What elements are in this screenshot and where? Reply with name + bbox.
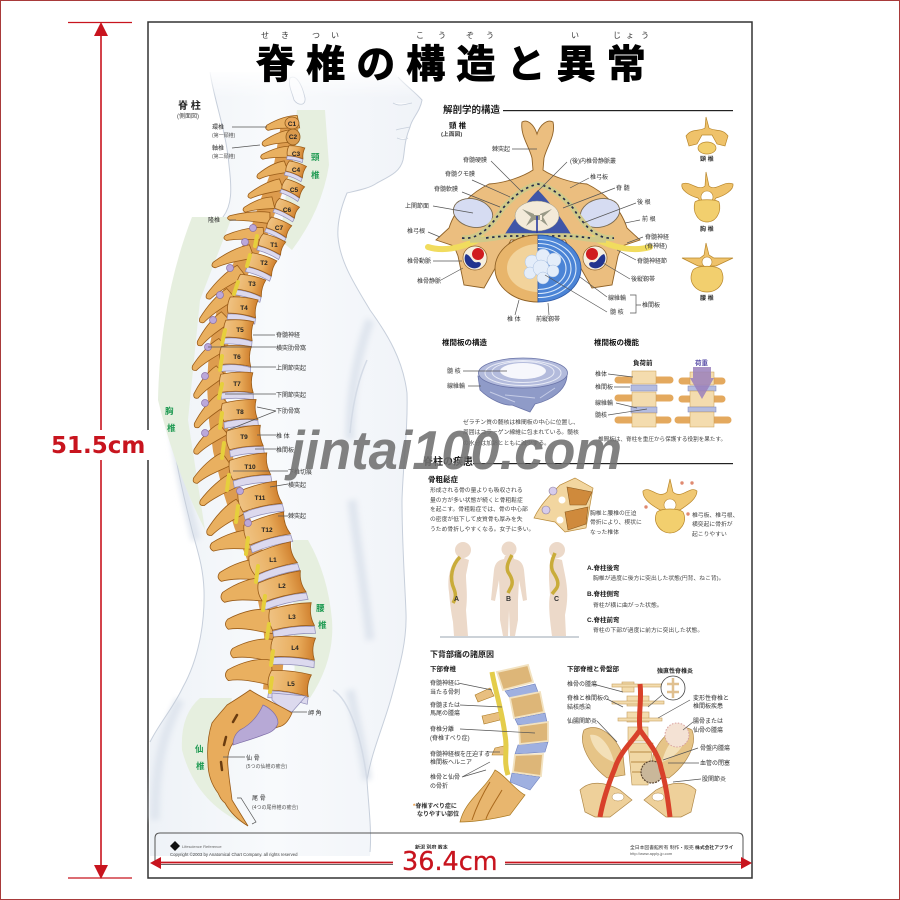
lower spine callouts: 脊髄神経根を圧迫する — [430, 750, 490, 758]
figure B scoliosis — [491, 542, 527, 636]
spondylolisthesis note — [413, 802, 459, 818]
sacrum ridges — [630, 752, 651, 772]
fracture caption — [590, 509, 642, 536]
title furigana: じ — [613, 31, 621, 40]
fracture sites caption: 横突起に骨折が — [692, 520, 733, 528]
cervical vertebra callouts: 椎骨動脈 — [407, 257, 431, 265]
cervical vertebra callouts: (脊神経) — [645, 242, 667, 250]
vertebral arch — [436, 121, 640, 288]
side view callouts: 尾 骨 — [252, 795, 266, 802]
disc structure paragraph: ゼラチン質の髄核は椎間板の中心に位置し、 — [463, 418, 579, 426]
footer credits: 新潟 別府 教本 — [415, 844, 448, 851]
lower spine and pelvis heading: 下部脊椎と骨盤部 — [567, 664, 620, 673]
vertebra level labels: T6 — [233, 354, 241, 361]
disc function caption: 椎間板は、脊柱を重圧から保護する役割を果たす。 — [598, 435, 726, 443]
watermark: jintai100.com — [284, 419, 622, 481]
section: anatomical structure heading: (上面図) — [441, 130, 462, 138]
disc function callouts: 椎間板 — [595, 383, 613, 391]
vertebra level labels: T12 — [261, 527, 273, 534]
section: anatomical structure heading — [441, 104, 733, 138]
spinal cord — [515, 201, 559, 231]
posture descriptions: A.脊柱後弯 — [587, 563, 620, 572]
title furigana: き — [281, 31, 289, 40]
title furigana: こ — [416, 31, 424, 40]
left panel heading — [177, 99, 201, 120]
vertebra level labels: C2 — [289, 134, 298, 141]
green region labels: 頸 — [311, 152, 320, 162]
side view callouts: (第二頸椎) — [212, 153, 236, 160]
side view callouts: (第一頸椎) — [212, 132, 236, 139]
vertebra level labels: T8 — [236, 409, 244, 416]
aorta and iliac arteries — [600, 684, 670, 817]
figure: spine side view — [188, 115, 316, 826]
osteoporosis paragraph: 形成される骨の量よりも吸収される — [430, 486, 523, 494]
cervical vertebra callouts: 椎弓板 — [590, 173, 608, 181]
width dimension arrow — [150, 847, 752, 877]
disc function: before load: 負荷前 — [633, 358, 653, 367]
pelvis callouts: 仙腸関節炎 — [567, 717, 597, 725]
sacrum and coccyx — [208, 690, 292, 826]
side view callouts: 棘突起 — [288, 512, 306, 520]
mini vertebra: cervical: 頸 椎 — [700, 155, 714, 163]
arm and fold lines — [333, 360, 367, 780]
posture descriptions: 胸椎が過度に後方に突出した状態(円背、ねこ背)。 — [593, 574, 724, 582]
lower spine callouts: 椎間板ヘルニア — [430, 758, 472, 766]
central vessel — [536, 216, 538, 236]
cervical vertebra callouts: 脊髄軟膜 — [434, 185, 458, 193]
regional shading: lumbar — [292, 540, 332, 698]
regional shading: cervical — [280, 110, 329, 250]
disc function heading: 椎間板の機能 — [594, 337, 639, 347]
grey matter — [522, 209, 552, 226]
side view callouts: 上関節突起 — [276, 364, 306, 372]
vertebra level labels: L5 — [287, 681, 295, 688]
cervical vertebra callouts: 椎弓根 — [407, 227, 425, 235]
height dimension arrow: 51.5cm — [51, 433, 145, 459]
disc function: under load — [678, 358, 728, 427]
vertebra level labels: C3 — [292, 151, 301, 158]
vertebra level labels: T4 — [240, 305, 248, 312]
side view callouts: (4つの尾骨椎の癒合) — [252, 804, 298, 811]
lower spine callouts: 椎骨と仙骨 — [430, 773, 460, 781]
lumbar stack — [612, 682, 664, 741]
mini vertebra: cervical — [686, 117, 728, 163]
spondylolisthesis note: なりやすい部位 — [417, 810, 459, 818]
vertebra level labels: T9 — [240, 434, 248, 441]
venous plexus dots — [462, 184, 614, 238]
fracture caption: なった椎体 — [590, 528, 619, 536]
width dimension arrow: 36.4cm — [402, 847, 498, 877]
posture descriptions: 脊柱が横に曲がった状態。 — [593, 601, 663, 609]
disc structure callouts: 線維輪 — [447, 382, 465, 390]
cervical vertebra callouts: 脊髄硬膜 — [463, 156, 487, 164]
iliac bone tumor — [665, 723, 689, 747]
posture figures: A — [454, 596, 459, 603]
lower spine callouts: 脊椎分離 — [430, 725, 454, 733]
mini vertebra: lumbar: 腰 椎 — [700, 294, 714, 302]
side view callouts: 下関節突起 — [276, 391, 306, 399]
vertebra level labels: C5 — [290, 187, 299, 194]
posture descriptions: B.脊柱側弯 — [587, 589, 620, 598]
osteoporosis fractured vertebrae — [534, 478, 593, 532]
disc function callouts: 椎体 — [595, 370, 607, 378]
vertebra with fracture sites — [643, 479, 697, 533]
title furigana: う — [641, 31, 649, 40]
sacral foramina — [221, 715, 237, 770]
side view callouts: 椎間板 — [276, 446, 294, 454]
green region labels — [165, 152, 327, 771]
annulus rings — [538, 239, 577, 298]
spinal nerves — [219, 236, 273, 692]
vertebra level labels: C6 — [283, 207, 292, 214]
obturator foramina — [612, 793, 624, 801]
title furigana: つ — [312, 31, 320, 40]
title furigana: い — [571, 31, 579, 40]
section: anatomical structure heading: 頸 椎 — [449, 120, 467, 130]
posture figures: C — [554, 596, 559, 603]
cervical vertebra callouts: 前縦靱帯 — [536, 315, 560, 323]
nerve roots — [492, 672, 508, 775]
pelvis callouts: 股関節炎 — [702, 775, 726, 783]
disc function callouts — [595, 370, 647, 419]
lower spine callouts: 脊髄または — [430, 701, 460, 709]
side view callouts: 脊髄神経 — [276, 331, 300, 339]
side view callouts — [208, 123, 322, 824]
side view callouts: 下椎切痕 — [288, 468, 312, 476]
side view callouts: 隆椎 — [208, 216, 220, 224]
vertebra level labels: T11 — [255, 495, 266, 502]
mini vertebra: thoracic: 胸 椎 — [700, 225, 714, 233]
ankylosing spondylitis inset — [661, 676, 685, 700]
lower spine callouts: 脊髄神経に — [430, 679, 460, 687]
vertebra level labels: C1 — [288, 121, 297, 128]
low back pain heading: 下背部痛の諸原因 — [430, 649, 494, 659]
cervical vertebra callouts: 上関節面 — [405, 202, 429, 210]
mini vertebra: thoracic — [682, 172, 733, 233]
title furigana: う — [438, 31, 446, 40]
sacral ridges — [472, 782, 502, 820]
side view callouts: 環椎 — [212, 123, 224, 131]
pelvis callouts: 骨盤内腫瘍 — [700, 744, 730, 752]
diagram: cervical vertebra top view — [428, 121, 650, 302]
lower spine callouts: 当たる骨刺 — [430, 688, 460, 696]
title furigana: せ — [261, 31, 269, 40]
fracture caption: 胸椎と腰椎の圧迫 — [590, 509, 637, 517]
pelvis callouts: 椎骨の腫瘍 — [567, 680, 597, 688]
green region labels: 胸 — [165, 406, 174, 416]
mini vertebra: lumbar — [682, 243, 733, 302]
figure A kyphosis — [448, 542, 471, 636]
posture descriptions: 脊柱の下部が過度に前方に突出した状態。 — [593, 626, 703, 634]
body contour lines — [150, 72, 422, 852]
osteoporosis heading: 骨粗鬆症 — [428, 474, 458, 484]
pelvis callouts: 脊椎と椎間板の — [567, 694, 609, 702]
side view callouts: 椎 体 — [276, 432, 290, 440]
disc structure illustration — [478, 358, 568, 412]
vertebral body — [495, 235, 538, 302]
green region labels: 椎 — [196, 761, 205, 771]
side view callouts: (5つの仙椎の癒合) — [246, 763, 287, 770]
cervical vertebra callouts: 脊髄神経節 — [637, 257, 667, 265]
pelvis callouts: 強直性脊椎炎 — [657, 667, 693, 675]
vertebral artery and vein left — [463, 246, 487, 270]
disc function callouts: 線維輪 — [595, 399, 613, 407]
figure: human body silhouette — [150, 68, 430, 856]
fracture sites caption — [692, 511, 738, 538]
fracture site markers — [644, 481, 694, 516]
vertebral bodies and discs — [219, 117, 316, 712]
face details — [289, 77, 412, 140]
ground line — [440, 636, 579, 638]
disc structure paragraph: 周囲はコラーゲン線維に包まれている。髄核 — [463, 428, 579, 436]
regional shading: thoracic — [158, 217, 232, 530]
cervical vertebra callouts: 脊 髄 — [616, 184, 630, 192]
title furigana — [261, 31, 649, 40]
vertebra level labels: L1 — [269, 557, 277, 564]
cervical vertebra callouts: 椎 体 — [507, 315, 521, 323]
left panel heading: (側面図) — [177, 112, 199, 120]
lower spine illustration — [460, 665, 548, 822]
footer credits — [415, 844, 734, 856]
vertebra level labels: L4 — [291, 645, 299, 652]
footer credits: http://www.apply-jp.com — [630, 851, 673, 856]
title furigana: ょ — [626, 31, 634, 40]
posture figures: B — [506, 596, 511, 603]
cervical vertebra callouts — [405, 145, 669, 323]
footer credits: 全日本図書館所有 制作・販売 株式会社アプライ — [630, 844, 734, 851]
fracture sites caption: 起こりやすい — [692, 530, 727, 538]
cervical vertebra callouts: 棘突起 — [492, 145, 510, 153]
vertebra level labels: C7 — [275, 225, 284, 232]
vertebra level labels: T10 — [244, 464, 256, 471]
osteoporosis paragraph: を起こす。骨粗鬆症では、骨の中心部 — [430, 505, 528, 513]
vertebra level labels: T7 — [233, 381, 241, 388]
disc function: under load: 荷重 — [695, 358, 708, 367]
osteoporosis paragraph: 量の方が多い状態が続くと骨粗鬆症 — [430, 496, 523, 504]
pelvic tumor — [641, 761, 663, 783]
cervical vertebra callouts: 後 根 — [637, 198, 651, 206]
cervical vertebra callouts: 椎骨静脈 — [417, 277, 441, 285]
title: 脊椎の構造と異常 — [256, 44, 657, 87]
footer box — [155, 833, 743, 862]
pelvis and aorta illustration — [580, 676, 696, 817]
cervical vertebra callouts: 椎間板 — [642, 301, 660, 309]
pelvis callouts: 仙骨の腫瘍 — [693, 726, 723, 734]
vertebra level labels: T1 — [270, 242, 278, 249]
superior articular facets — [450, 194, 496, 232]
fracture caption: 骨折により、楔状に — [590, 518, 642, 526]
cervical vertebra callouts: 後縦靱帯 — [631, 275, 655, 283]
annulus fibrosus — [538, 235, 581, 302]
disc structure callouts — [447, 367, 507, 390]
spondylolisthesis note: *脊椎すべり症に — [413, 802, 457, 810]
cervical vertebra callouts: (後)内椎骨静脈叢 — [570, 157, 616, 165]
cervical vertebra callouts: 脊髄クモ膜 — [445, 170, 475, 178]
disc structure paragraph — [463, 418, 579, 447]
spinal nerves — [428, 238, 650, 249]
vertebra level labels: L3 — [288, 614, 296, 621]
cervical vertebra callouts: 前 根 — [642, 215, 656, 223]
posture descriptions: C.脊柱前弯 — [587, 615, 620, 624]
lower spine callouts: の骨折 — [430, 782, 448, 790]
costal facets — [202, 224, 256, 526]
vertebral artery and vein right — [583, 246, 607, 270]
osteoporosis paragraph: の密度が低下して皮質骨も厚みを失 — [430, 515, 523, 523]
section: anatomical structure heading: 解剖学的構造 — [443, 104, 501, 116]
disc structure heading: 椎間板の構造 — [442, 337, 487, 347]
disc structure paragraph: の水分は加齢とともに減少する。 — [463, 439, 550, 447]
side view callouts: 軸椎 — [212, 144, 224, 152]
vertebral column backing — [216, 125, 290, 690]
vertebra level labels: T2 — [260, 260, 268, 267]
disc function: before load — [618, 358, 670, 427]
green region labels: 腰 — [316, 603, 325, 613]
dura band — [462, 184, 614, 240]
load arrow — [690, 367, 714, 399]
osteoporosis paragraph: うため骨折しやすくなる。女子に多い。 — [430, 525, 534, 533]
sacrum — [628, 743, 653, 785]
left panel heading: 脊 柱 — [178, 99, 201, 112]
iliac wing highlights — [590, 735, 686, 762]
cancellous bone — [507, 244, 538, 292]
vertebra level labels: C4 — [292, 167, 301, 174]
pelvis callouts: 腸骨または — [693, 718, 723, 725]
green region labels: 仙 — [195, 744, 204, 754]
lower spine callouts: 馬尾の腫瘍 — [430, 709, 460, 717]
osteoporosis paragraph — [430, 486, 534, 533]
pelvis callouts: 血管の閉塞 — [700, 759, 730, 767]
pelvis callouts: 変形性脊椎と — [693, 694, 729, 702]
side view callouts: 仙 骨 — [246, 754, 260, 762]
green region labels: 椎 — [318, 620, 327, 630]
lumbar spinous blocks — [475, 688, 508, 755]
posture figures — [440, 542, 579, 638]
side view callouts: 岬 角 — [308, 709, 322, 717]
soft body shading — [155, 320, 370, 820]
lumbar bodies — [497, 665, 548, 776]
sacrum — [460, 770, 525, 822]
vertebra level labels — [233, 121, 301, 688]
publisher logo and copyright: Lifescience Reference — [182, 844, 222, 849]
epidural space — [505, 190, 571, 234]
figure C lordosis — [549, 542, 567, 636]
green region labels: 椎 — [167, 423, 176, 433]
lumbar discs — [505, 684, 548, 790]
hips — [580, 783, 696, 817]
publisher logo and copyright — [170, 841, 298, 857]
pelvis callouts: 結核感染 — [567, 703, 591, 711]
cervical vertebra callouts: 脊髄神経 — [645, 233, 669, 241]
spinous processes — [188, 115, 300, 688]
height dimension arrow — [50, 22, 149, 879]
sacral canal — [233, 705, 278, 745]
title furigana: い — [331, 31, 339, 40]
posture descriptions — [587, 563, 724, 634]
vertebra level labels: T3 — [248, 281, 256, 288]
vertebra level labels: T5 — [236, 327, 244, 334]
disc function callouts: 髄核 — [595, 411, 607, 419]
title furigana: ぞ — [466, 31, 474, 40]
poster frame — [148, 22, 752, 878]
head fade — [200, 68, 430, 98]
nucleus pulposus — [524, 249, 561, 284]
section: spinal diseases heading: 脊柱の疾患 — [423, 455, 473, 468]
vertebra level labels: L2 — [278, 583, 286, 590]
pelvis callouts: 椎間板疾患 — [693, 702, 723, 710]
cervical vertebra callouts: 線維輪 — [608, 294, 626, 302]
cervical vertebra callouts: 髄 核 — [610, 308, 624, 316]
side view callouts: 横突起 — [288, 481, 306, 489]
pelvis callouts — [567, 667, 730, 783]
lower spine heading: 下部脊椎 — [430, 664, 456, 673]
green region labels: 椎 — [311, 170, 320, 180]
disc structure callouts: 髄 核 — [447, 367, 461, 375]
iliac wings — [582, 728, 694, 778]
side view callouts: 下肋骨窩 — [276, 407, 300, 415]
fracture sites caption: 椎弓板、椎弓根、 — [692, 511, 738, 519]
side view callouts: 横突肋骨窩 — [276, 344, 306, 352]
lower spine callouts — [430, 679, 535, 790]
lower spine callouts: (脊椎すべり症) — [430, 734, 470, 742]
publisher logo and copyright: Copyright ©2003 by Anatomical Chart Company. all rights reserved — [170, 852, 298, 857]
regional shading: sacral — [182, 698, 240, 822]
title furigana: う — [486, 31, 494, 40]
